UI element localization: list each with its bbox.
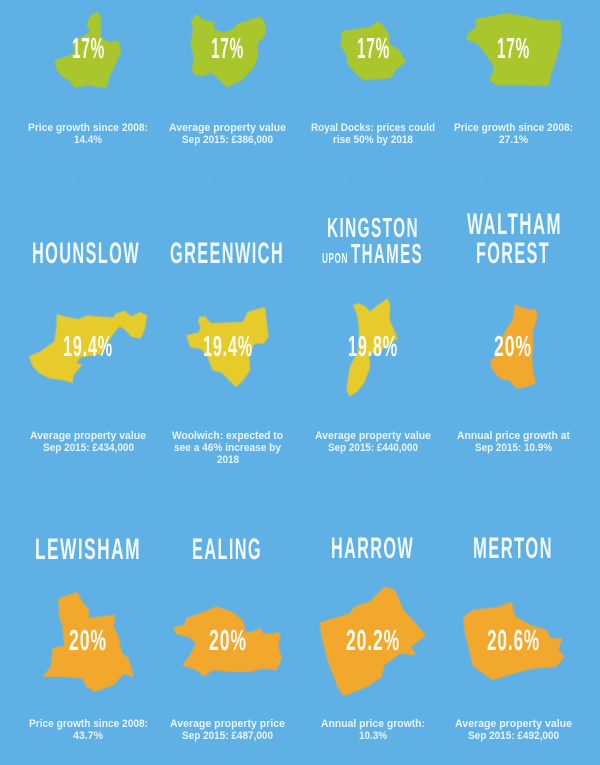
map: Harrow [321,587,425,695]
caption: annual growth 10.3% [321,718,425,742]
map: Ealing [174,607,281,675]
caption: price growth 27.1%: 27.1% [499,134,528,146]
caption: price growth 14.4%: 14.4% [74,134,102,146]
map: Lewisham [44,593,133,691]
map: borough 4 [467,14,560,85]
heading: Kingston upon Thames [322,212,423,269]
caption: price growth 43.7%: 43.7% [73,730,103,742]
caption: Woolwich [172,430,283,466]
caption: annual growth 10.3%: 10.3% [359,730,387,742]
value: 20.6%: 20.6% [487,625,540,657]
value: 19.4%: 19.4% [63,331,113,363]
panel: Harrow [321,532,425,742]
caption: price growth 27.1%: Price growth since 2008: [454,122,573,134]
caption: average value £434,000: Sep 2015: £434,000 [43,442,134,454]
map: Merton [464,603,563,679]
heading: Kingston upon Thames: THAMES [351,238,423,269]
map: borough 3 [341,22,405,79]
panel: borough 1, top row [28,13,148,146]
value: 17%: 17% [497,33,530,65]
map: borough 2 [191,15,265,87]
map: Kingston upon Thames [347,299,397,395]
panel: Lewisham [29,533,148,742]
value: 17%: 17% [357,33,390,65]
panel: borough 3, top row [311,22,435,146]
caption: Royal Docks: rise 50% by 2018 [333,134,413,146]
caption: price growth 14.4%: Price growth since 2008: [28,122,148,134]
value: 19.4%: 19.4% [203,331,253,363]
caption: average value £492,000: Average property value [455,718,572,730]
caption: annual growth 10.3%: Annual price growth: [321,718,425,730]
caption: annual growth 10.9%: Sep 2015: 10.9% [475,442,552,454]
map: Hounslow [30,312,146,382]
heading: Greenwich: GREENWICH [170,237,284,270]
value: 20%: 20% [69,625,107,657]
map: Waltham Forest [491,306,536,388]
value: 20%: 20% [209,625,247,657]
caption: annual growth 10.9%: Annual price growth at [457,430,570,442]
caption: average value £434,000: Average property value [30,430,146,442]
caption: price growth 43.7%: Price growth since 2008: [29,718,148,730]
panel: Ealing [170,533,285,742]
caption: Woolwich: Woolwich: expected to [172,430,283,442]
caption: Woolwich: 2018 [217,454,239,466]
panel: Waltham Forest [457,208,570,454]
heading: Kingston upon Thames: UPON [322,250,348,267]
caption: average value £440,000: Average property value [315,430,431,442]
map: Greenwich [187,308,268,386]
caption: average value £386,000: Sep 2015: £386,000 [182,134,273,146]
caption: price growth 43.7% [29,718,148,742]
caption: average value £440,000 [315,430,431,454]
caption: annual growth 10.9% [457,430,570,454]
heading: Lewisham: LEWISHAM [35,533,141,566]
caption: Royal Docks: Royal Docks: prices could [311,122,435,134]
map: borough 1 [56,13,120,87]
value: 17%: 17% [211,33,244,65]
caption: Woolwich: see a 46% increase by [174,442,282,454]
panel: borough 2, top row [169,15,286,146]
panel: Hounslow [30,237,146,454]
heading: Waltham Forest [467,208,562,270]
panel: borough 4, top row [454,14,573,146]
heading: Kingston upon Thames: KINGSTON [327,212,419,243]
caption: average price £487,000: Sep 2015: £487,000 [182,730,273,742]
caption: average value £492,000 [455,718,572,742]
panel: Merton [455,532,572,742]
caption: average value £492,000: Sep 2015: £492,000 [468,730,559,742]
value: 19.8%: 19.8% [348,331,398,363]
value: 20%: 20% [494,331,532,363]
caption: average price £487,000: Average property price [170,718,285,730]
caption: average value £434,000 [30,430,146,454]
caption: average value £440,000: Sep 2015: £440,000 [328,442,418,454]
caption: price growth 27.1% [454,122,573,146]
value: 17%: 17% [72,33,105,65]
caption: average value £386,000: Average property value [169,122,286,134]
value: 20.2%: 20.2% [346,625,400,657]
caption: price growth 14.4% [28,122,148,146]
heading: Ealing: EALING [192,533,262,566]
caption: average value £386,000 [169,122,286,146]
caption: Royal Docks [311,122,435,146]
panel: Greenwich [170,237,284,466]
panel: Kingston upon Thames [315,212,431,454]
caption: average price £487,000 [170,718,285,742]
heading: Harrow: HARROW [331,532,414,565]
heading: Hounslow: HOUNSLOW [32,237,140,270]
